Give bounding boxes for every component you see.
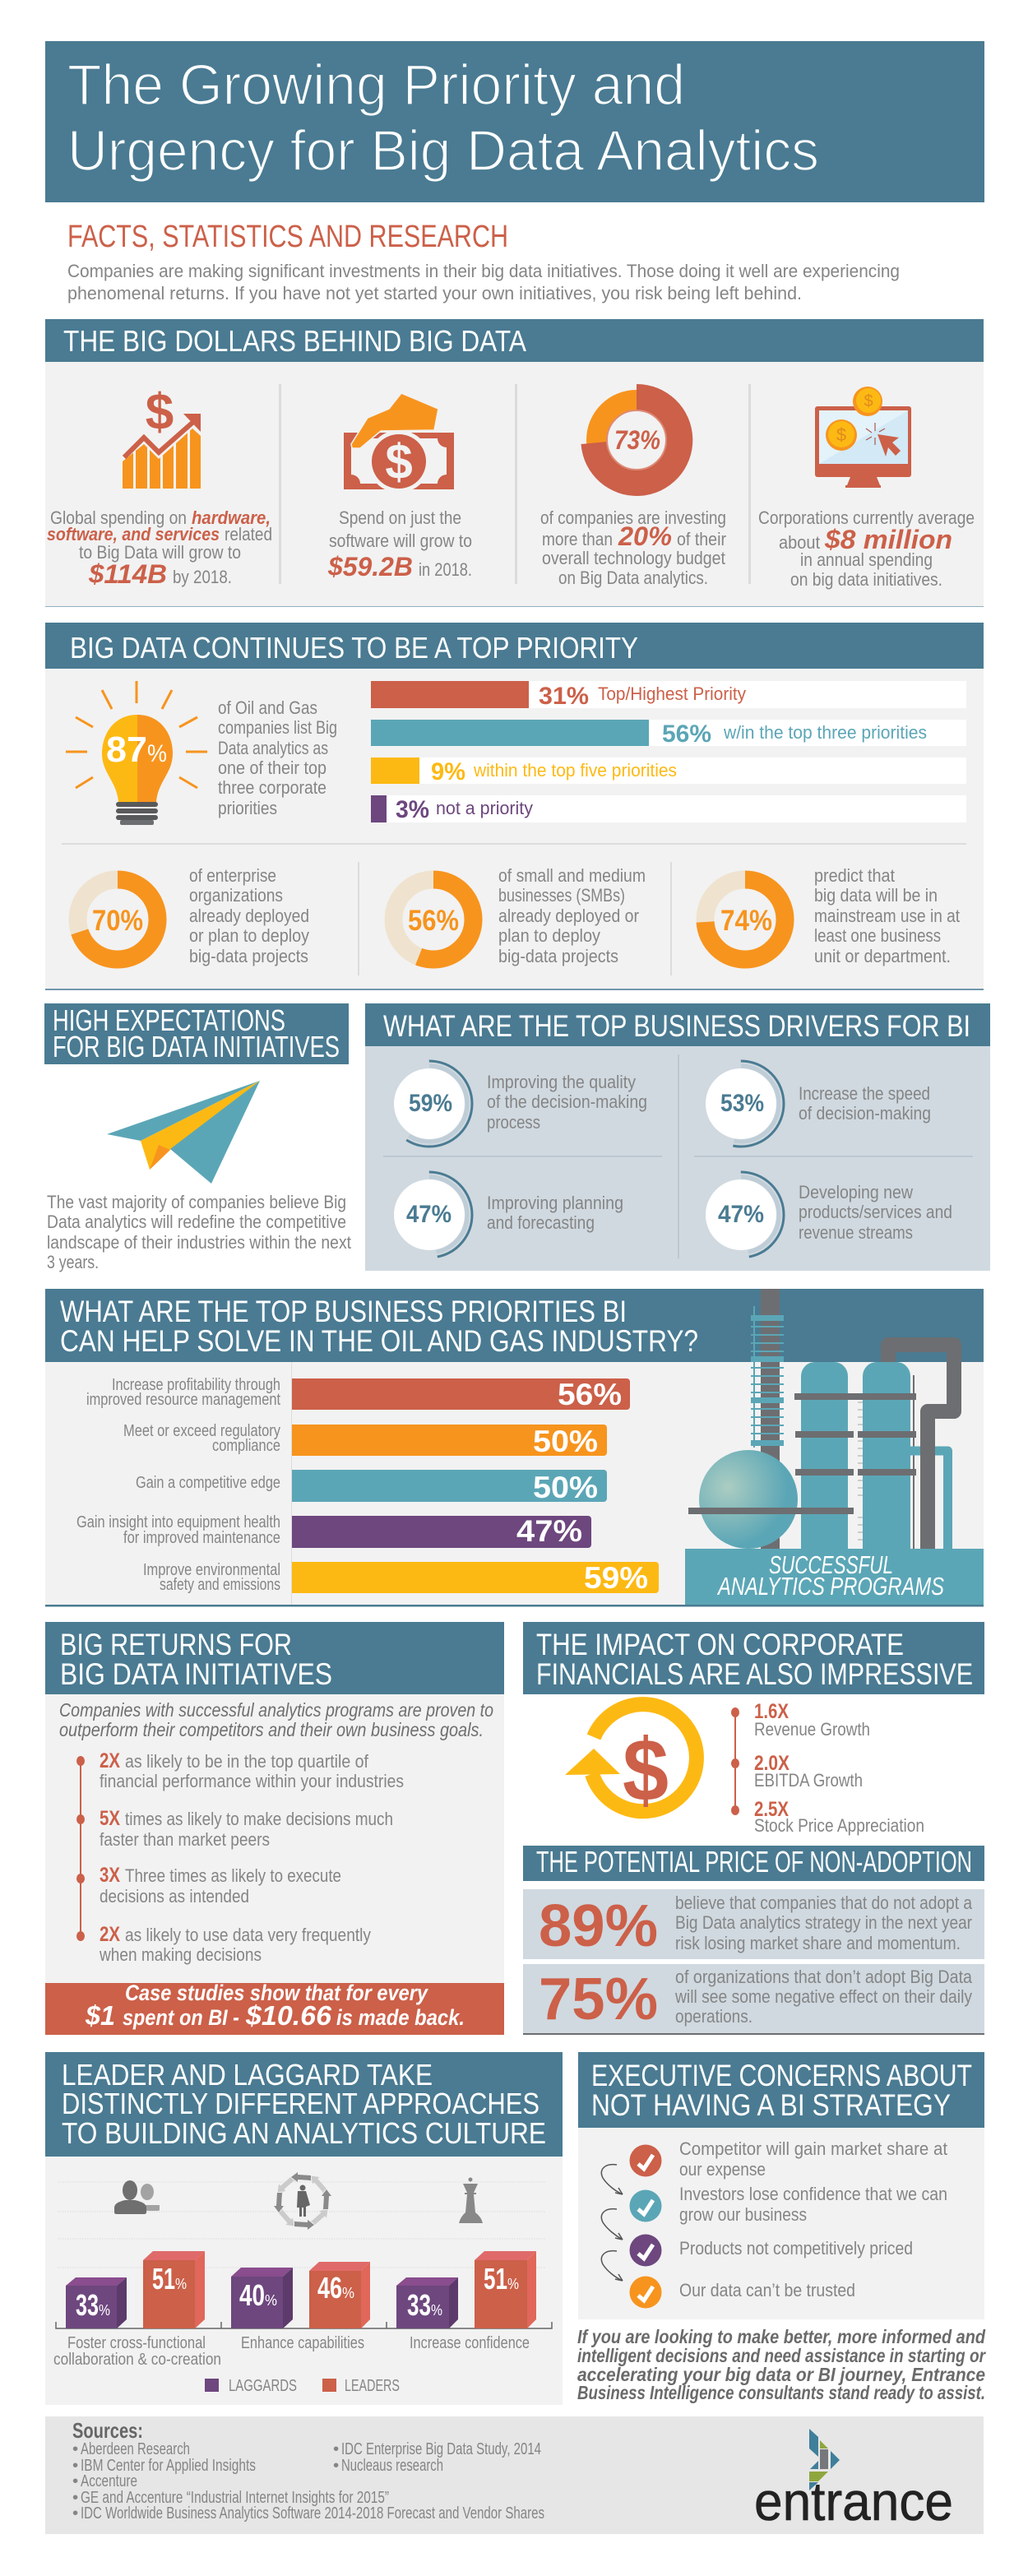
panel: high expectations <box>44 1003 352 1272</box>
text: annual spending: Corporations currently average <box>758 507 975 528</box>
text: annual spending: $8 million <box>824 525 952 554</box>
group: enhance capabilities: Enhance capabilities <box>241 2333 364 2352</box>
heading: big dollars <box>45 319 984 362</box>
metric: stock price: 2.5X <box>754 1798 789 1821</box>
stat: 75%: will see some negative effect on their daily <box>674 1986 973 2007</box>
text: enterprise: or plan to deploy <box>189 925 310 946</box>
bar: 9% top five: within the top five priorities <box>473 760 677 781</box>
text: oil and gas: Data analytics as <box>218 738 328 758</box>
text: global spending: to Big Data will grow to <box>79 542 241 563</box>
bar: 56% profitability: improved resource management <box>86 1390 280 1409</box>
stat: 75%: of organizations that don’t adopt Big Data <box>675 1967 972 1987</box>
item: 2X top quartile <box>76 1749 404 1791</box>
text: annual spending <box>758 507 975 590</box>
group: enhance capabilities: % <box>265 2292 277 2309</box>
bar: 56% profitability <box>86 1375 630 1411</box>
text: SMBs: of small and medium <box>498 865 646 886</box>
list: sources column one: IBM Center for Applied Insights <box>81 2456 256 2475</box>
text: technology budget: more than <box>542 529 613 549</box>
intro heading: FACTS, STATISTICS AND RESEARCH <box>67 220 508 254</box>
group: increase confidence <box>396 2251 536 2352</box>
icon: light bulb 87% <box>66 681 207 825</box>
bar: 50% compliance: Meet or exceed regulatory <box>123 1421 281 1440</box>
icon: light bulb 87%: 87 <box>106 730 147 770</box>
driver: 47% new products: revenue streams <box>799 1222 913 1243</box>
bar: 56% profitability: 56% <box>558 1378 622 1411</box>
title banner <box>45 41 984 202</box>
text: annual spending: on big data initiatives. <box>790 569 942 590</box>
driver: 53% decision speed: of decision-making <box>799 1103 931 1124</box>
heading: high expectations <box>44 1003 349 1064</box>
icon: 73% donut <box>581 384 692 496</box>
donut: 74%: 74% <box>720 905 772 937</box>
item: 5X faster decisions: faster than market peers <box>100 1829 270 1850</box>
heading: impact: THE IMPACT ON CORPORATE <box>536 1628 904 1661</box>
heading: leader and laggard: LEADER AND LAGGARD TAKE <box>62 2058 433 2092</box>
concern: investors lose confidence <box>630 2184 947 2225</box>
driver: 59% decision quality: process <box>487 1112 540 1133</box>
list: sources column two: IDC Enterprise Big Data Study, 2014 <box>341 2439 541 2458</box>
heading: big returns <box>45 1622 504 1694</box>
heading: top priority <box>45 623 984 669</box>
text: enterprise: big-data projects <box>189 946 308 966</box>
metric: EBITDA growth: 2.0X <box>754 1752 790 1775</box>
driver: 59% decision quality: of the decision-making <box>487 1091 647 1112</box>
bar: 3% not a priority: not a priority <box>436 798 533 818</box>
text: SMBs: plan to deploy <box>498 925 601 946</box>
heading: sources: Sources: <box>72 2418 143 2443</box>
text: technology budget: overall technology budget <box>542 548 726 568</box>
panel: sources and logo <box>45 2416 984 2534</box>
panel: potential price of non-adoption <box>523 1845 984 2035</box>
group: enhance capabilities: 46 <box>317 2271 342 2305</box>
callout: case studies: $10.66 <box>245 2000 332 2031</box>
text: SMBs <box>498 865 646 966</box>
heading: high expectations: FOR BIG DATA INITIATIVES <box>53 1030 340 1063</box>
text: vast majority: 3 years. <box>47 1252 99 1272</box>
illustration: refinery: ANALYTICS PROGRAMS <box>716 1572 944 1601</box>
icon: monitor with coins: $ <box>836 424 846 445</box>
list: sources column one: IDC Worldwide Business Analytics Software 2014-2018 Forecast and Vendor Shares <box>81 2504 544 2523</box>
driver: 59% decision quality: 59% <box>409 1090 452 1117</box>
item: 3X execute decisions <box>76 1864 341 1907</box>
list: sources column one: Aberdeen Research <box>81 2439 190 2458</box>
icon: circular dollar arrow: $ <box>623 1720 669 1819</box>
bar: 56% profitability: Increase profitability through <box>112 1375 280 1394</box>
bar: 47% equipment health: Gain insight into equipment health <box>76 1513 280 1531</box>
heading: top priority: BIG DATA CONTINUES TO BE A TOP PRIORITY <box>70 631 638 665</box>
text: software spend: $59.2B <box>327 552 413 581</box>
bar: 3% not a priority: 3% <box>396 796 429 823</box>
panel: big returns <box>45 1622 504 2035</box>
arrows: connecting concerns <box>601 2165 623 2281</box>
text: software spend: Spend on just the <box>339 507 461 528</box>
bar: 31% top priority <box>371 681 966 710</box>
illustration: refinery <box>685 1289 984 1605</box>
text: mainstream use: least one business <box>814 925 941 946</box>
text: oil and gas <box>218 697 337 818</box>
heading: big returns: BIG DATA INITIATIVES <box>60 1657 332 1691</box>
group: cross-functional collaboration: collaboration & co-creation <box>53 2350 221 2369</box>
group: increase confidence: 33 <box>407 2288 431 2322</box>
list: sources column two: • <box>333 2456 339 2475</box>
text: mainstream use: unit or department. <box>814 946 951 966</box>
chart: laggards versus leaders <box>53 2251 552 2369</box>
text: annual spending: about <box>779 532 821 553</box>
group: increase confidence: % <box>431 2302 442 2319</box>
icon: hand on banknote: $ <box>385 434 413 489</box>
text: returns intro <box>59 1699 493 1740</box>
bar: 47% equipment health <box>76 1513 591 1548</box>
icon: two people <box>114 2180 160 2214</box>
text: technology budget: on Big Data analytics. <box>558 568 708 588</box>
logo: entrance <box>754 2429 953 2532</box>
heading: leader and laggard <box>45 2052 563 2157</box>
callout: case studies: Case studies show that for every <box>125 1981 429 2005</box>
metric: stock price <box>731 1798 924 1836</box>
item: 2X top quartile: 2X <box>100 1749 120 1772</box>
donut: 56% <box>393 880 474 959</box>
stat: 89%: Big Data analytics strategy in the next year <box>675 1912 972 1933</box>
bar: 50% compliance <box>123 1421 607 1458</box>
stat: 89%: believe that companies that do not adopt a <box>675 1893 972 1913</box>
panel: impact on corporate financials <box>523 1622 984 1836</box>
panel: leader and laggard <box>45 2052 563 2405</box>
intro text: phenomenal returns. If you have not yet started your own initiatives, you risk being left behind. <box>67 283 802 303</box>
text: vast majority: Data analytics will redefine the competitive <box>47 1212 346 1232</box>
heading: executive concerns <box>578 2052 984 2128</box>
group: enhance capabilities <box>231 2262 370 2352</box>
group: enhance capabilities: % <box>342 2285 354 2301</box>
group: cross-functional collaboration: Foster cross-functional <box>67 2333 206 2352</box>
concern: products priced: Products not competitively priced <box>679 2238 913 2259</box>
call to action text <box>577 2326 986 2403</box>
text: mainstream use <box>814 865 961 966</box>
text: SMBs: big-data projects <box>498 946 618 966</box>
donut: 70% <box>77 880 158 959</box>
legend: LEADERS <box>345 2376 400 2395</box>
callout: case studies: $1 <box>85 2000 115 2031</box>
text: enterprise: organizations <box>189 885 283 906</box>
list: sources column one: • <box>72 2488 78 2507</box>
heading: high expectations: HIGH EXPECTATIONS <box>53 1003 285 1037</box>
driver: 47% new products <box>698 1172 952 1258</box>
text: vast majority: The vast majority of companies believe Big <box>47 1192 346 1212</box>
heading: business priorities: CAN HELP SOLVE IN THE OIL AND GAS INDUSTRY? <box>60 1324 698 1358</box>
bar: 47% equipment health: 47% <box>516 1514 582 1548</box>
text: mainstream use: big data will be in <box>814 885 938 906</box>
bar: 31% top priority: 31% <box>539 683 589 710</box>
text: global spending: related <box>225 524 272 544</box>
driver: 47% planning <box>387 1172 623 1258</box>
concern: data trust: Our data can’t be trusted <box>679 2280 855 2300</box>
list: sources column two: Nucleaus research <box>341 2456 443 2475</box>
list: sources column one: • <box>72 2472 78 2490</box>
heading: impact <box>523 1622 984 1694</box>
call to action text: accelerating your big data or BI journey, Entrance <box>577 2364 985 2385</box>
bar: 31% top priority: Top/Highest Priority <box>598 683 746 704</box>
bar: 9% top five: 9% <box>431 758 465 785</box>
metric: stock price: Stock Price Appreciation <box>754 1815 924 1836</box>
stat: 89%: 89% <box>539 1893 658 1959</box>
item: 2X top quartile: financial performance within your industries <box>100 1771 404 1791</box>
concern: investors lose confidence: Investors lose confidence that we can <box>679 2184 947 2204</box>
text: vast majority <box>47 1192 352 1272</box>
legend <box>205 2376 400 2395</box>
heading: leader and laggard: DISTINCTLY DIFFERENT APPROACHES <box>62 2087 539 2120</box>
concern: investors lose confidence: grow our business <box>679 2204 807 2225</box>
icon: circular dollar arrow <box>565 1704 697 1819</box>
text: enterprise: of enterprise <box>189 865 276 886</box>
list: sources column one: • <box>72 2456 78 2475</box>
icon: dollar with growth chart <box>123 384 201 490</box>
title banner: Urgency for Big Data Analytics <box>67 118 819 183</box>
stat: 89% <box>523 1889 984 1959</box>
driver: 47% new products: products/services and <box>799 1202 952 1222</box>
heading: executive concerns: NOT HAVING A BI STRATEGY <box>591 2088 951 2122</box>
driver: 59% decision quality: Improving the quality <box>487 1072 637 1092</box>
metric: EBITDA growth <box>731 1752 863 1791</box>
item: 2X use data: when making decisions <box>99 1944 262 1965</box>
driver: 47% new products: Developing new <box>799 1182 914 1202</box>
text: enterprise: already deployed <box>189 906 309 926</box>
panel: top business drivers <box>365 1003 990 1271</box>
text: annual spending: in annual spending <box>800 549 933 570</box>
list: sources column one: • <box>72 2504 78 2523</box>
panel: the big dollars behind big data <box>45 319 984 607</box>
item: 5X faster decisions <box>76 1807 393 1850</box>
list: sources column one: GE and Accenture “Industrial Internet Insights for 2015” <box>81 2488 389 2507</box>
concern: competitor market share <box>630 2138 948 2180</box>
callout: case studies: is made back. <box>336 2005 465 2030</box>
item: 5X faster decisions: 5X <box>100 1807 120 1830</box>
intro text: Companies are making significant investments in their big data initiatives. Those doing it well are experiencing <box>67 261 900 281</box>
text: returns intro: Companies with successful analytics programs are proven to <box>59 1699 493 1721</box>
stat: 89%: risk losing market share and momentum. <box>675 1933 961 1953</box>
bar: 59% environmental: safety and emissions <box>160 1575 280 1594</box>
group: increase confidence: Increase confidence <box>410 2333 530 2352</box>
bar: 59% environmental: Improve environmental <box>143 1560 280 1579</box>
text: enterprise <box>189 865 310 966</box>
stat: 75%: operations. <box>675 2006 752 2027</box>
driver: 47% planning: 47% <box>406 1201 451 1228</box>
text: vast majority: landscape of their industries within the next <box>47 1232 352 1253</box>
illustration: refinery: SUCCESSFUL <box>769 1550 893 1579</box>
text: software spend: in 2018. <box>419 559 472 580</box>
bar: 9% top five <box>371 758 966 785</box>
list: sources column one: • <box>72 2439 78 2458</box>
concern: competitor market share: Competitor will gain market share at <box>679 2138 948 2159</box>
bar: 47% equipment health: for improved maintenance <box>123 1528 280 1547</box>
concern: competitor market share: our expense <box>679 2159 766 2180</box>
text: oil and gas: one of their top <box>218 758 326 778</box>
text: mainstream use: predict that <box>814 865 896 886</box>
bar: 50% competitive edge <box>136 1470 607 1504</box>
text: oil and gas: priorities <box>218 798 277 818</box>
icon: monitor with coins: $ <box>864 392 873 410</box>
concern: products priced <box>630 2234 913 2267</box>
intro text <box>67 261 900 303</box>
group: cross-functional collaboration: 51 <box>152 2262 175 2296</box>
item: 3X execute decisions: Three times as likely to execute <box>125 1865 341 1886</box>
bar: 50% competitive edge: 50% <box>533 1471 598 1504</box>
text: technology budget <box>540 507 726 588</box>
stat: 75% <box>523 1964 984 2035</box>
metric: revenue growth <box>731 1700 870 1740</box>
text: global spending <box>47 507 272 589</box>
text: global spending: by 2018. <box>173 567 232 587</box>
item: 2X use data <box>76 1923 372 1965</box>
donut: 70%: 70% <box>92 905 143 937</box>
text: technology budget: 20% <box>618 521 672 551</box>
text: returns intro: outperform their competitors and their own business goals. <box>59 1719 484 1740</box>
stat: 75%: 75% <box>539 1967 658 2032</box>
list: sources column one <box>72 2439 544 2523</box>
donut: 74% <box>706 880 785 959</box>
icon: dollar with growth chart: $ <box>146 384 174 441</box>
item: 3X execute decisions: decisions as intended <box>100 1886 249 1907</box>
driver: 59% decision quality <box>387 1061 647 1147</box>
group: cross-functional collaboration: % <box>175 2276 187 2292</box>
text: mainstream use: mainstream use in at <box>814 906 961 926</box>
logo: entrance: entrance <box>754 2471 953 2532</box>
heading: big returns: BIG RETURNS FOR <box>60 1628 292 1661</box>
driver: 53% decision speed: Increase the speed <box>799 1083 930 1104</box>
panel: big data continues to be a top priority <box>45 623 984 990</box>
heading: big dollars: THE BIG DOLLARS BEHIND BIG DATA <box>63 324 526 358</box>
text: global spending: hardware, <box>192 507 271 528</box>
driver: 53% decision speed: 53% <box>720 1090 764 1117</box>
list: sources column two <box>333 2439 541 2475</box>
panel: executive concerns <box>578 2052 984 2319</box>
panel: top business priorities <box>45 1289 984 1607</box>
concern: data trust <box>630 2277 855 2308</box>
icon: chess queen <box>459 2178 483 2223</box>
text: technology budget: of companies are investing <box>540 507 726 528</box>
group: enhance capabilities: 40 <box>239 2278 265 2312</box>
text: global spending: software, and services <box>47 524 220 544</box>
heading: business priorities <box>45 1289 984 1362</box>
driver: 47% new products: 47% <box>718 1201 764 1228</box>
group: cross-functional collaboration: % <box>99 2302 110 2319</box>
bar: 3% not a priority <box>371 795 966 823</box>
text: oil and gas: three corporate <box>218 777 326 798</box>
callout: case studies <box>45 1981 504 2035</box>
heading: business priorities: WHAT ARE THE TOP BUSINESS PRIORITIES BI <box>60 1295 627 1328</box>
title banner: The Growing Priority and <box>67 53 685 117</box>
legend: LAGGARDS <box>229 2376 297 2395</box>
bar: 56% top three: w/in the top three priorities <box>723 722 927 743</box>
bar: 56% top three: 56% <box>662 720 711 748</box>
bar: 56% top three <box>371 720 966 748</box>
driver: 47% planning: and forecasting <box>487 1212 595 1233</box>
list: sources column one: Accenture <box>81 2472 137 2490</box>
driver: 47% planning: Improving planning <box>487 1193 623 1213</box>
driver: 53% decision speed <box>698 1061 931 1147</box>
item: 2X top quartile: as likely to be in the top quartile of <box>125 1751 369 1772</box>
text: SMBs: already deployed or <box>498 906 639 926</box>
icon: person in cycle <box>274 2172 331 2230</box>
group: increase confidence: 51 <box>484 2262 507 2296</box>
callout: case studies: spent on BI - <box>123 2005 239 2030</box>
text: global spending: Global spending on <box>50 507 187 528</box>
group: cross-functional collaboration: 33 <box>76 2288 99 2322</box>
bar: 59% environmental: 59% <box>584 1561 648 1595</box>
item: 2X use data: 2X <box>100 1923 120 1946</box>
icon: 73% donut: 73% <box>614 425 660 455</box>
text: software spend: software will grow to <box>329 530 472 551</box>
metric: EBITDA growth: EBITDA Growth <box>754 1770 863 1791</box>
text: software spend <box>327 507 472 581</box>
bar: 50% compliance: 50% <box>533 1425 598 1458</box>
icon: light bulb 87%: % <box>147 740 167 767</box>
heading: leader and laggard: TO BUILDING AN ANALYTICS CULTURE <box>62 2116 546 2150</box>
donut: 56%: 56% <box>408 905 459 937</box>
text: oil and gas: of Oil and Gas <box>218 697 317 718</box>
list: sources column two: • <box>333 2439 339 2458</box>
bar: 50% competitive edge: Gain a competitive edge <box>136 1473 280 1492</box>
item: 2X use data: as likely to use data very frequently <box>125 1925 372 1945</box>
metric: revenue growth: Revenue Growth <box>754 1719 870 1740</box>
text: global spending: $114B <box>88 559 167 589</box>
text: technology budget: of their <box>677 529 726 549</box>
text: SMBs: businesses (SMBs) <box>498 885 625 906</box>
icon: paper plane <box>107 1081 260 1184</box>
group: cross-functional collaboration <box>53 2251 221 2369</box>
item: 5X faster decisions: times as likely to make decisions much <box>125 1809 393 1829</box>
metric: revenue growth: 1.6X <box>754 1700 789 1723</box>
group: increase confidence: % <box>507 2276 519 2292</box>
icon: monitor with coins <box>815 387 911 488</box>
item: 3X execute decisions: 3X <box>100 1864 120 1887</box>
icon: hand on banknote <box>344 393 454 493</box>
bar: 50% compliance: compliance <box>212 1436 280 1455</box>
bar: 59% environmental <box>143 1560 659 1595</box>
text: oil and gas: companies list Big <box>218 717 337 738</box>
